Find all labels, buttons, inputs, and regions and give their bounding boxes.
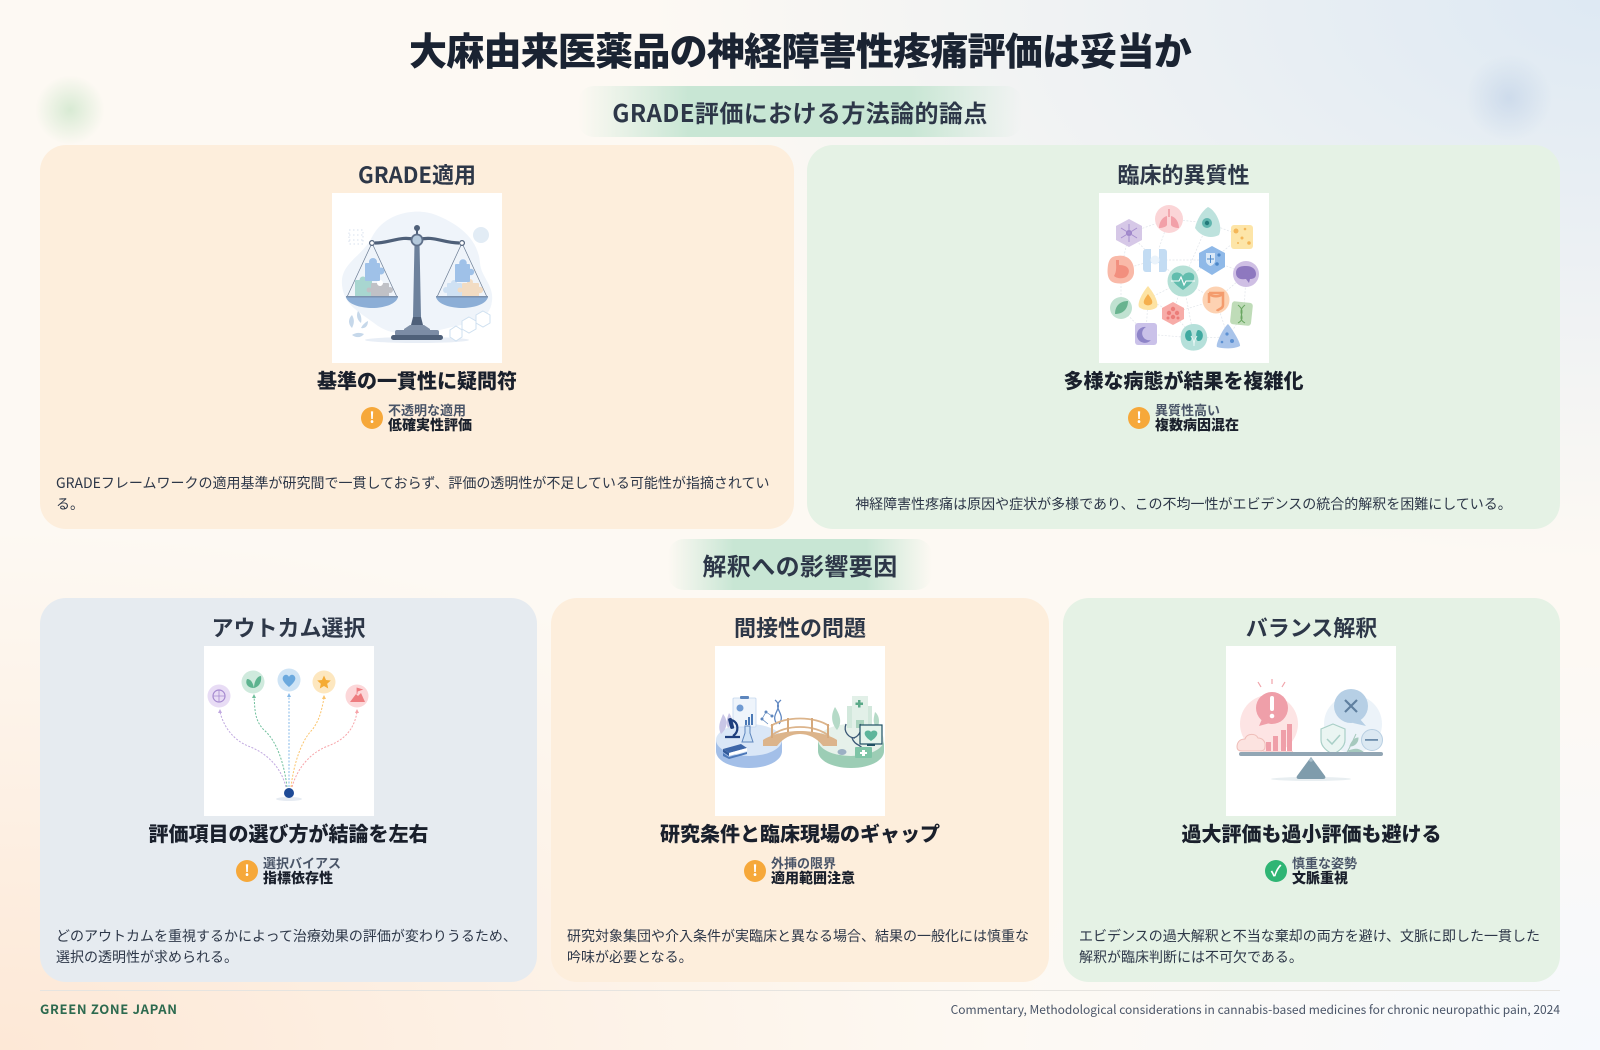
badge [361,400,472,435]
badge [744,853,855,888]
card title: 間接性の問題 [734,611,866,643]
panel: アウトカム選択 [40,598,537,982]
section heading: GRADE [578,86,1022,137]
badge [236,853,341,888]
pans [346,297,398,308]
card subtitle: 過大評価も過小評価も避ける [1182,818,1442,847]
icon: warning: ! [244,860,250,881]
icon: warning [236,860,258,882]
icon: warning [1128,407,1150,429]
icon: warning: ! [752,860,758,881]
card subtitle: 評価項目の選び方が結論を左右 [148,818,428,847]
badge label: 異質性高い [1155,400,1220,419]
badge [1265,853,1357,888]
icon: warning: ! [369,407,375,428]
clinic side [857,706,872,728]
illustration: balance scale with puzzle pieces [332,193,502,363]
card body text: エビデンスの過大解釈と不当な棄却の両方を避け、文脈に即した一貫した解釈が臨床判断には不可欠である。 [1079,926,1540,967]
badge value: 低確実性評価 [388,415,472,435]
decorative green blur [35,75,105,145]
badge label: 選択バイアス [263,853,341,872]
panel: 臨床的異質性 [807,145,1560,529]
icon: check [1265,860,1287,882]
decorative blue blur [1465,54,1553,142]
card subtitle: 基準の一貫性に疑問符 [317,365,517,394]
section heading: GRADE: GRADE評価における方法論的論点 [612,94,988,129]
card title: バランス解釈 [1246,611,1377,643]
card subtitle: 多様な病態が結果を複雑化 [1064,365,1304,394]
badge label: 不透明な適用 [388,400,466,419]
card body text: GRADEフレームワークの適用基準が研究間で一貫しておらず、評価の透明性が不足している可能性が指摘されている。 [56,473,770,514]
beam and column [375,238,459,243]
illustration: balance of over and under estimation [1226,646,1396,816]
illustration: bridge between research and clinic [715,646,885,816]
section heading: interpretation [668,539,932,590]
icon: warning [361,407,383,429]
panel: 間接性の問題 [551,598,1049,982]
badge [1128,400,1239,435]
icon: check: ✓ [1271,860,1281,881]
title: 大麻由来医薬品の神経障害性疼痛評価は妥当か [409,21,1191,76]
illustration: constellation of conditions [1099,193,1269,363]
card body text: どのアウトカムを重視するかによって治療効果の評価が変わりうるため、選択の透明性が求められる。 [56,926,517,967]
right pieces [447,283,462,297]
card body text: 研究対象集団や介入条件が実臨床と異なる場合、結果の一般化には慎重な吟味が必要となる。 [567,926,1029,967]
badge label: 慎重な姿勢 [1292,853,1357,872]
footer brand: GREEN ZONE JAPAN [40,999,178,1018]
badge value: 文脈重視 [1292,868,1348,888]
icon: warning [744,860,766,882]
research side [733,698,756,727]
panel: バランス解釈 [1063,598,1560,982]
footer citation: Commentary, Methodological considerations in cannabis-based medicines for chronic neuropathic pain, 2024 [951,1001,1560,1018]
card subtitle: 研究条件と臨床現場のギャップ [660,818,940,847]
card title: アウトカム選択 [211,611,366,643]
left pieces [355,280,372,297]
card title: GRADE適用 [358,158,476,190]
card body text: 神経障害性疼痛は原因や症状が多様であり、この不均一性がエビデンスの統合的解釈を困難にしている。 [855,494,1512,514]
badge value: 指標依存性 [263,868,333,888]
panel: GRADE適用 [40,145,794,529]
badge label: 外挿の限界 [771,853,836,872]
section heading: interpretation: 解釈への影響要因 [702,547,898,582]
illustration: branching outcome paths [204,646,374,816]
card title: 臨床的異質性 [1117,158,1250,190]
badge value: 複数病因混在 [1155,415,1239,435]
badge value: 適用範囲注意 [771,868,855,888]
bridge [763,731,837,746]
icon: warning: ! [1136,407,1142,428]
